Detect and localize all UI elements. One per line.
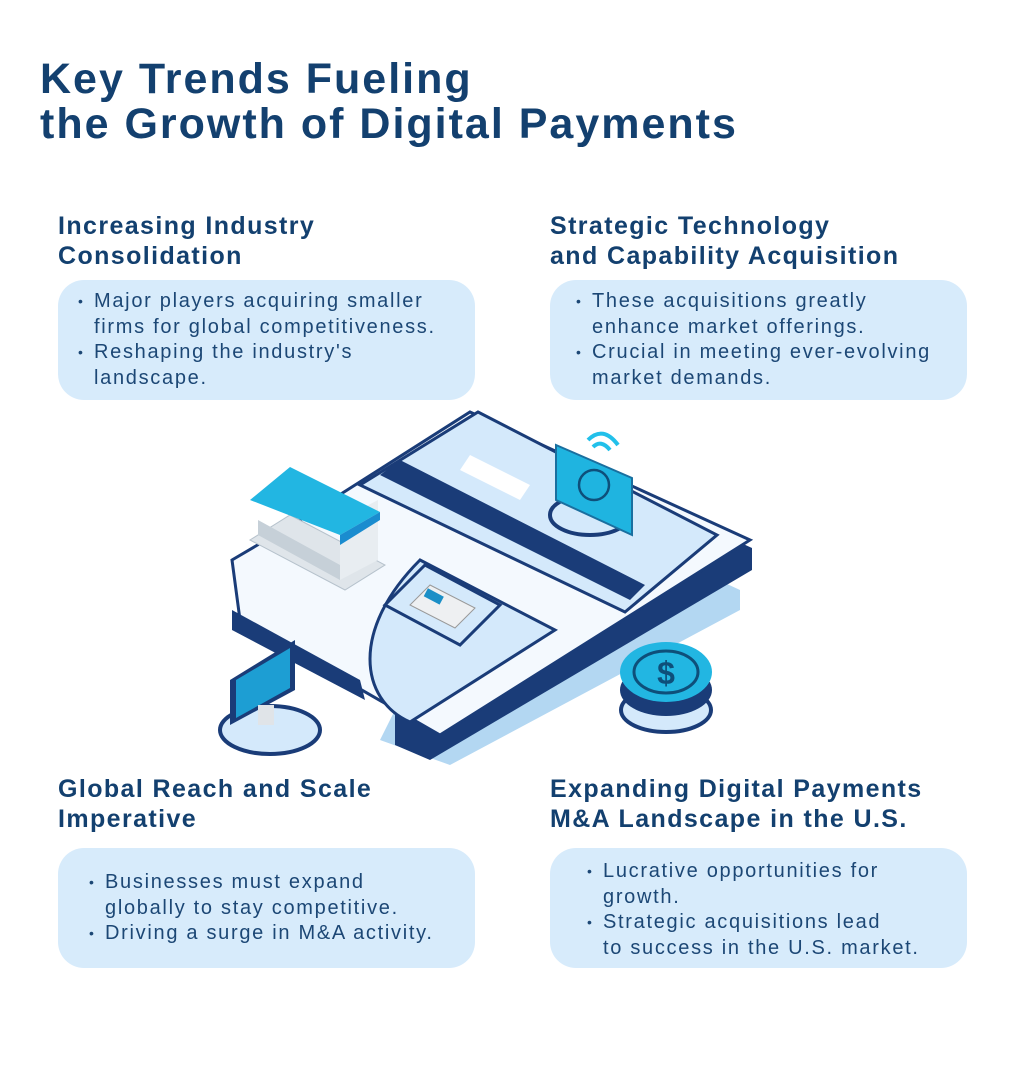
panel: acquisition (550, 280, 967, 400)
panel: acquisition: These acquisitions greatly (592, 290, 867, 312)
panel: US M&A (550, 848, 967, 968)
panel: consolidation: Major players acquiring smaller (94, 290, 423, 312)
icon: pay terminal (385, 565, 500, 645)
heading: consolidation: Consolidation (58, 242, 243, 270)
icon: dollar coin (620, 642, 712, 732)
heading: global reach: Imperative (58, 805, 197, 833)
panel: global reach: Businesses must expand (105, 871, 365, 893)
panel: global reach (58, 848, 475, 968)
panel: global reach: globally to stay competitive. (105, 896, 399, 918)
panel: global reach: Driving a surge in M&A activity. (105, 922, 434, 944)
panel: acquisition: enhance market offerings. (592, 316, 865, 338)
heading: acquisition: Strategic Technology (550, 212, 830, 240)
heading: global reach (58, 775, 372, 833)
panel: acquisition: Crucial in meeting ever-evolving (592, 341, 931, 363)
panel: US M&A: to success in the U.S. market. (603, 936, 920, 958)
heading: US M&A: Expanding Digital Payments (550, 775, 923, 803)
panel: US M&A: Lucrative opportunities for (603, 860, 879, 882)
card (360, 412, 717, 612)
heading: US M&A: M&A Landscape in the U.S. (550, 805, 908, 833)
panel: US M&A: growth. (603, 886, 680, 908)
heading: consolidation: Increasing Industry (58, 212, 315, 240)
title: the Growth of Digital Payments (40, 100, 738, 148)
heading: US M&A (550, 775, 923, 833)
panel: consolidation: Reshaping the industry's (94, 341, 353, 363)
title: Key Trends Fueling (40, 55, 473, 103)
heading: global reach: Global Reach and Scale (58, 775, 372, 803)
icon: globe card (550, 434, 632, 535)
paper curl (370, 560, 555, 722)
icon: dollar coin: $ (657, 655, 675, 691)
panel: consolidation: landscape. (94, 366, 208, 388)
panel: US M&A: Strategic acquisitions lead (603, 911, 881, 933)
panel: consolidation: firms for global competitiveness. (94, 316, 436, 338)
heading: acquisition: and Capability Acquisition (550, 242, 899, 270)
heading: consolidation (58, 212, 315, 270)
icon: bank (250, 467, 385, 590)
heading: acquisition (550, 212, 899, 270)
shadow (380, 470, 740, 765)
panel: consolidation (58, 280, 475, 400)
panel: acquisition: market demands. (592, 366, 772, 388)
tablet base (232, 412, 752, 760)
title (40, 55, 738, 148)
icon: monitor (220, 640, 320, 754)
